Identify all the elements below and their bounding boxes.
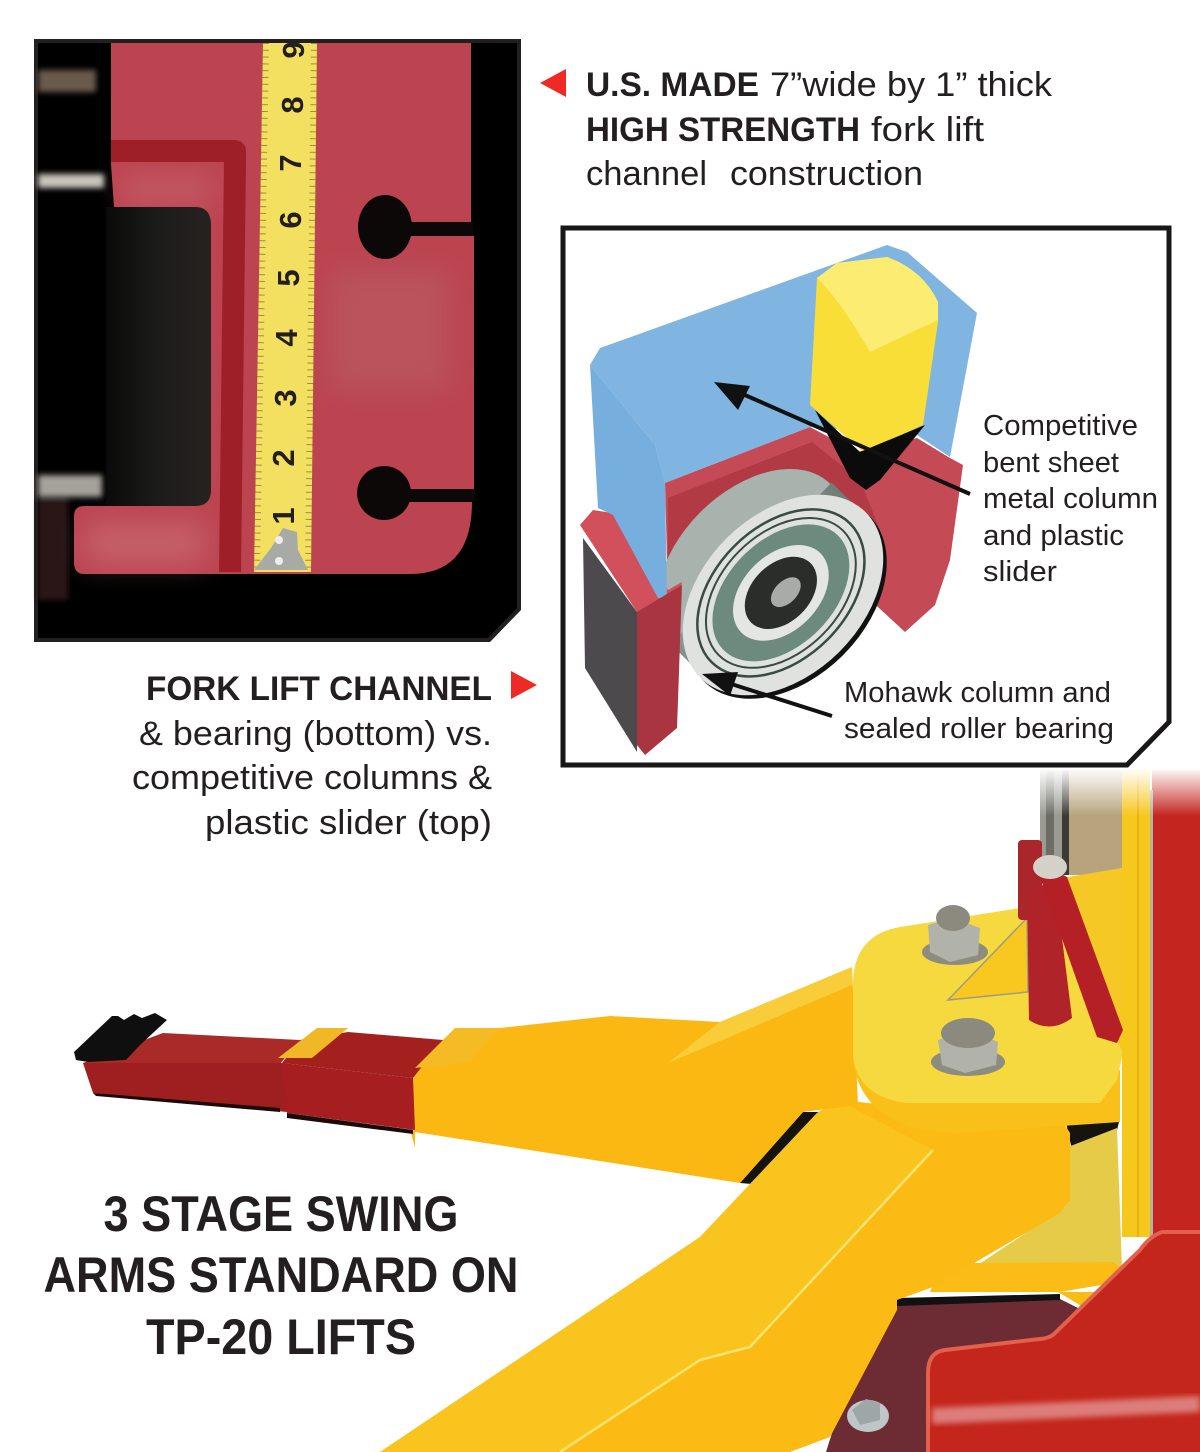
tape measure: 5 [271,269,306,287]
text: U.S. made channel description: U.S. MADE [586,66,759,104]
text: U.S. made channel description: fork lift [871,111,985,149]
base salmon edge [928,1232,1200,1452]
tape measure: 8 [275,96,310,114]
red bracket [665,427,963,632]
gusset triangle [948,918,1028,1000]
red bracket dark back [668,442,880,590]
text: fork lift channel caption: plastic slider (top) [205,804,492,842]
highlight on red base [932,1396,1200,1424]
weld bead [111,151,235,572]
arrow: left-pointing red marker [540,69,566,97]
text: fork lift channel caption: competitive columns & [132,759,492,797]
floor bolt [847,1399,889,1432]
left block dark face [583,538,637,752]
inner red stage front [282,1063,415,1130]
blue column left flange [590,365,667,598]
text: U.S. made channel description: HIGH STRENGTH [586,111,860,149]
panel bottom strip [930,1262,1122,1292]
photo: swing arm on lift [74,768,1200,1452]
left block red face [637,585,682,755]
rear red tube [1018,840,1042,920]
title: 3 stage swing arms [44,1186,518,1365]
photo: fork lift channel with tape measure [34,39,521,642]
pointer arrow: competitive column [714,382,970,494]
floor plate [826,1298,1082,1452]
label: competitive column: and plastic [983,520,1124,552]
lift nut upper [922,905,988,965]
black rubber pad [74,1013,167,1062]
arrow: right-pointing red marker [511,671,537,699]
text: fork lift channel caption [132,670,492,842]
tape measure: 6 [273,211,308,229]
tape measure: 7 [273,154,308,172]
label: competitive column [983,410,1158,588]
yellow collar [278,1028,348,1058]
outer red stage top [83,1033,300,1064]
blue competitive column wall [590,245,977,483]
tape measure: 4 [269,329,304,347]
fade at photo top [1035,768,1200,816]
photo: bearing and slider comparison [563,228,1169,765]
red channel plate [74,43,474,574]
upper yellow arm [408,967,858,1183]
shadow under outer stage [93,1093,280,1112]
mounting holes [357,195,475,520]
lift nut lower [931,1018,1005,1076]
shadow under inner stage [287,1113,413,1134]
label: Mohawk column: Mohawk column and [844,677,1111,709]
front red tube [1027,885,1072,1027]
lower arm lighter face [380,1100,933,1452]
dark gap between arms [740,1112,820,1184]
light patches on plate [85,178,450,564]
inner red stage top [282,1032,443,1078]
text: U.S. made channel description: construction [730,155,923,193]
label: Mohawk column [844,677,1114,745]
title: 3 stage swing arms: 3 STAGE SWING [104,1186,458,1242]
tan wall behind lever [1068,770,1124,875]
label: competitive column: slider [983,556,1057,588]
tape measure [254,41,317,572]
left red block top [580,510,682,612]
tape measure: 1 [266,507,301,525]
outer red stage front [83,1063,287,1112]
pale side panel [973,1128,1122,1268]
label: competitive column: metal column [983,483,1158,515]
hinge plate edge [853,1060,1120,1133]
text: U.S. made channel description: 7”wide by 1” thick [770,66,1053,104]
red column [1152,770,1200,1250]
label: competitive column: Competitive [983,410,1138,442]
title: 3 stage swing arms: TP-20 LIFTS [146,1309,416,1365]
black gap under hinge [1065,1118,1120,1150]
yellow arm collar highlight [415,1028,500,1068]
black shadow under slider [815,410,925,490]
red lift base [928,1232,1200,1452]
tape measure: 3 [268,389,303,407]
tape measure: 2 [266,449,301,467]
blurred background parts [38,70,104,600]
text: U.S. made channel description [586,66,1053,193]
floor plate shadow [897,1294,1060,1306]
hinge plate [853,868,1122,1103]
roller bearing [618,430,926,738]
slider top highlight [817,257,938,352]
yellow plastic slider [810,257,938,452]
pointer arrow: bearing [702,672,832,716]
washer on rod [1033,855,1067,879]
red lever [1040,863,1123,1043]
small yellow wedge [1058,1292,1100,1307]
yellow panel behind lever [1062,868,1122,1050]
upper arm ramp highlight [668,967,852,1063]
threaded rod and channel [1040,770,1069,880]
label: Mohawk column: sealed roller bearing [844,713,1114,745]
yellow column stripes [1122,770,1150,1237]
channel cutout [106,207,211,506]
label: competitive column: bent sheet [983,447,1119,479]
text: U.S. made channel description: channel [586,155,707,193]
lower yellow arm [380,1100,1070,1452]
text: fork lift channel caption: & bearing (bottom) vs. [139,715,492,753]
tape measure: 9 [276,41,311,59]
lower arm weld seam [560,1150,933,1452]
title: 3 stage swing arms: ARMS STANDARD ON [44,1247,518,1303]
text: fork lift channel caption: FORK LIFT CHANNEL [146,670,492,708]
